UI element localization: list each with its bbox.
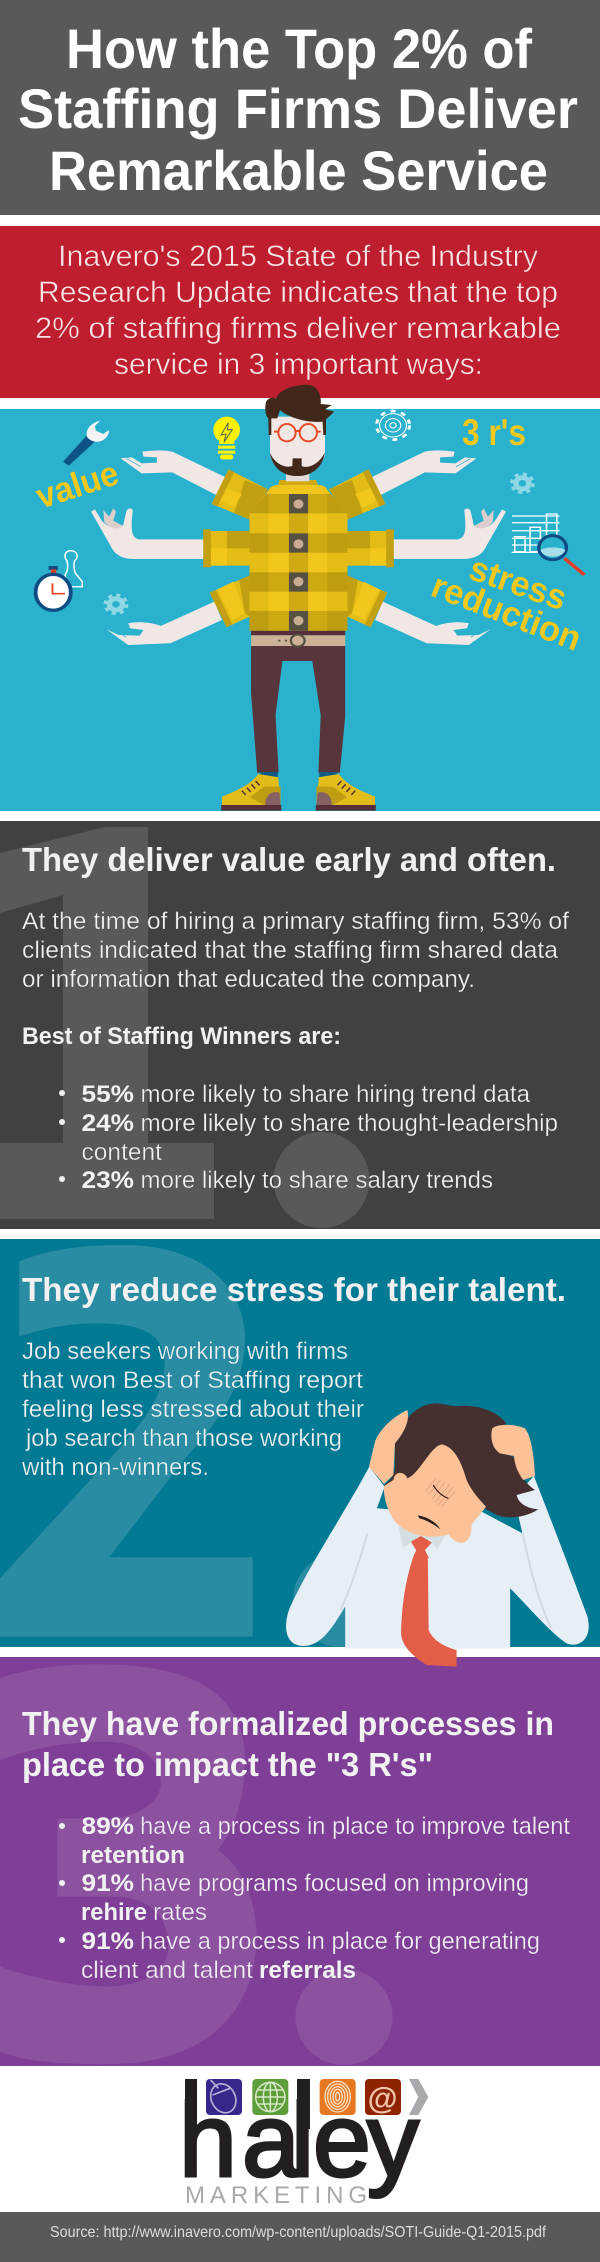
bullet list: referrals [259,1957,356,1984]
paragraph: with non-winners. [21,1454,209,1481]
label: stress reduction: stress [464,549,572,618]
large numeral 1 [0,827,370,1228]
bullet list: 24% [82,1110,134,1137]
heading: They reduce stress for their talent. [22,1271,566,1308]
bullet list: more likely to share salary trends [140,1167,493,1194]
title banner: How the Top 2% of [66,17,532,80]
intro panel: Inavero's 2015 State of the Industry [58,240,538,273]
bullet list [59,1813,570,1984]
bullet list: more likely to share hiring trend data [140,1081,531,1108]
pants [251,646,345,773]
bullet list: retention [81,1842,185,1869]
bullet list: content [82,1139,162,1166]
panel: reduce stress [0,1239,600,1647]
icon: chart and magnifier [512,514,584,575]
heading: They have formalized processes in [22,1705,554,1742]
bullet list: rehire [81,1899,147,1926]
logo icons: @ [368,2081,398,2115]
heading [22,1705,554,1783]
paragraph: Job seekers working with firms [22,1338,348,1365]
illustration: stressed man [286,1403,589,1667]
bullet list: 91% [82,1928,134,1955]
label: stress reduction: reduction [426,566,587,659]
paragraph: that won Best of Staffing report [22,1367,363,1394]
belt [251,631,345,647]
label: 3 r's: 3 r's [462,412,526,453]
source bar [0,2212,600,2262]
logo icons [206,2079,428,2117]
bullet list: more likely to share thought-leadership [140,1110,558,1137]
bullet list: rates [153,1899,207,1926]
shirt and tie [286,1467,589,1667]
panel: formalized processes [0,1657,600,2066]
head of multi-armed man [265,385,334,481]
bullet list: client and talent [81,1957,253,1984]
large numeral 2 [0,1245,387,1647]
paragraph [21,1338,364,1481]
paragraph: or information that educated the company. [22,966,475,993]
large numeral 3 [0,1664,392,2065]
boots [221,772,376,811]
icon: stopwatch and chess piece [36,551,82,610]
heading: place to impact the "3 R's" [22,1746,433,1783]
bullet list: have a process in place for generating [140,1928,540,1955]
title banner [0,0,600,215]
icon: light bulb [213,417,240,459]
bullet list: 55% [82,1081,134,1108]
icon: white gear [377,411,409,440]
bullet list: 91% [82,1870,134,1897]
intro panel: 2% of staffing firms deliver remarkable [35,312,561,345]
paragraph: At the time of hiring a primary staffing firm, 53% of [22,908,569,935]
title banner: Remarkable Service [49,139,548,202]
bullet list: have a process in place to improve talent [140,1813,570,1840]
intro panel: service in 3 important ways: [114,348,483,381]
paragraph: job search than those working [25,1425,342,1452]
subheading: Best of Staffing Winners are: [22,1023,341,1050]
paragraph [22,908,569,993]
logo tagline: MARKETING [185,2182,367,2209]
paragraph: feeling less stressed about their [22,1396,364,1423]
hero panel [0,385,600,811]
heading: They deliver value early and often. [22,841,556,878]
panel: value early and often [0,821,600,1229]
bullet list [59,1081,558,1194]
bullet list: 23% [82,1167,134,1194]
icon: wrench [63,421,109,466]
paragraph: clients indicated that the staffing firm shared data [22,937,559,964]
icon: pale gear left [105,595,127,614]
head and hands [369,1403,538,1558]
source bar: Source: http://www.inavero.com/wp-content/uploads/SOTI-Guide-Q1-2015.pdf [50,2224,546,2241]
illustration: multi-armed man [36,411,584,811]
intro panel [0,226,600,398]
title banner: Staffing Firms Deliver [18,77,578,140]
label: value: value [31,454,123,517]
bullet list: 89% [82,1813,134,1840]
footer logo [179,2079,428,2209]
icon: pale gear right [512,474,533,493]
bullet list: have programs focused on improving [140,1870,529,1897]
logo ascender extensions [185,2079,310,2129]
intro panel: Research Update indicates that the top [38,276,558,309]
logo wordmark: haley [179,2083,419,2199]
plaid shirt [250,480,347,631]
